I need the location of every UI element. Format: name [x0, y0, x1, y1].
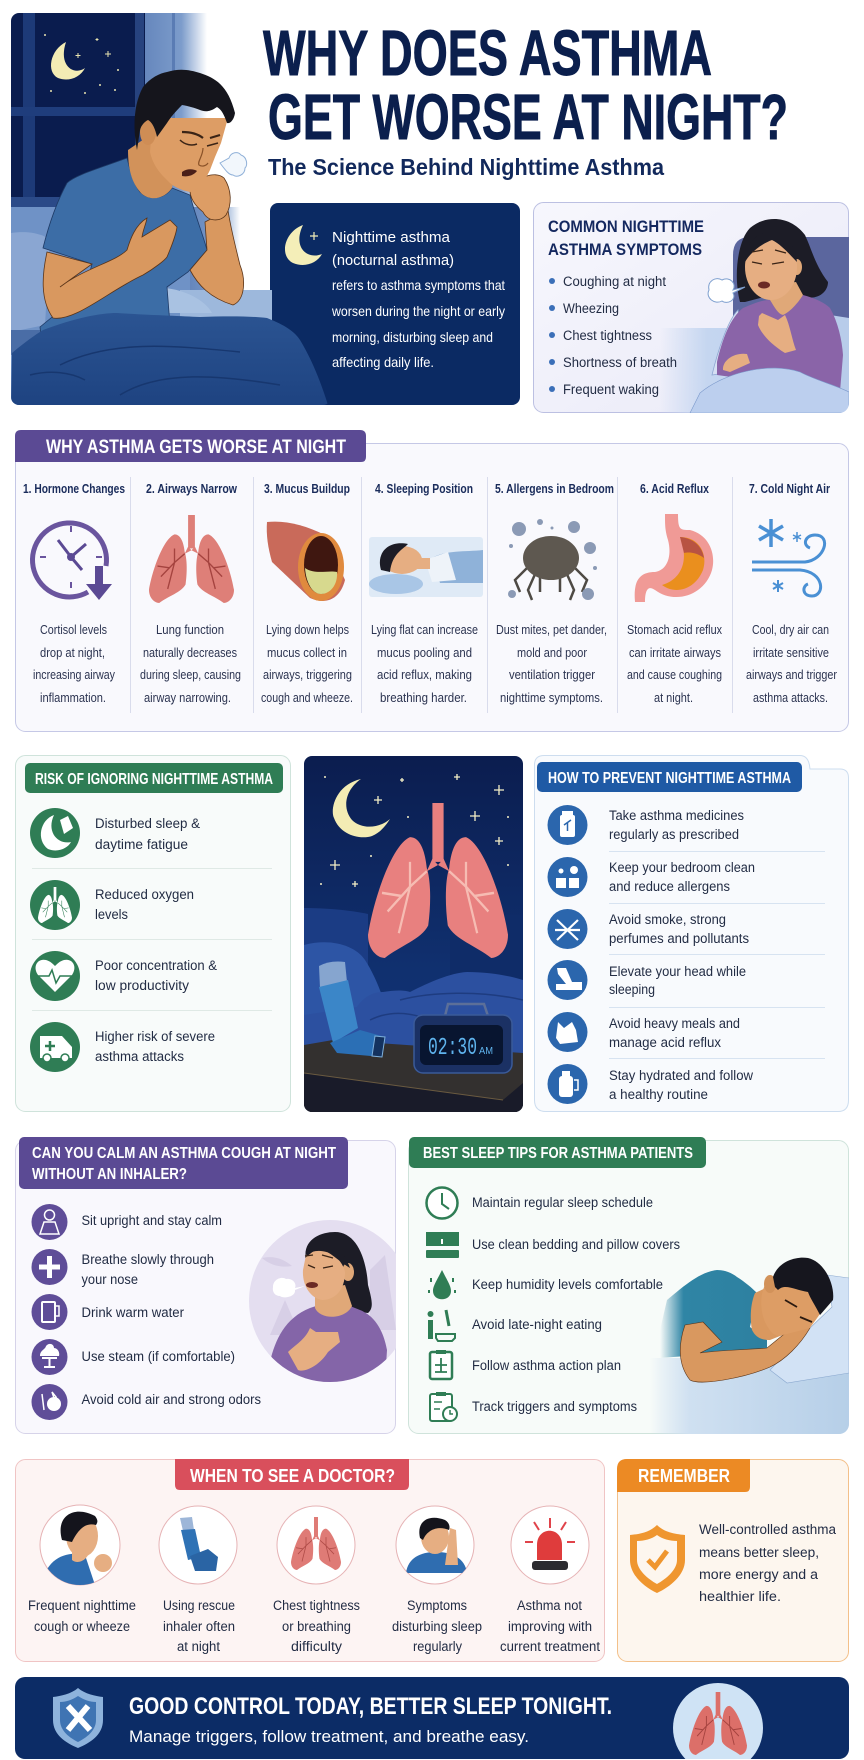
column 6: acid reflux: 6. Acid Reflux	[640, 482, 709, 496]
icon: dust mite	[508, 519, 597, 600]
lungs	[368, 803, 508, 958]
tip: late eating: Avoid late-night eating	[472, 1317, 602, 1332]
heading	[548, 218, 704, 259]
tip: medicines: regularly as prescribed	[609, 827, 739, 842]
symptom list: Chest tightness	[563, 328, 652, 343]
sign: frequent cough: Frequent nighttime	[28, 1598, 136, 1613]
icon: lungs in circle	[673, 1683, 763, 1760]
tip: bedding: Use clean bedding and pillow covers	[472, 1237, 680, 1252]
symptom list: Frequent waking	[563, 382, 659, 397]
inhaler	[319, 962, 385, 1057]
tip: breathe slowly: your nose	[82, 1272, 138, 1287]
risk: reduced oxygen: levels	[95, 907, 128, 922]
column 5: allergens: Dust mites, pet dander,	[496, 623, 607, 637]
column 4: sleeping position: Lying flat can increase	[371, 623, 478, 637]
sign: disturbed sleep: disturbing sleep	[392, 1619, 482, 1634]
column 5: allergens: mold and poor	[517, 646, 587, 660]
tip: action plan: Follow asthma action plan	[472, 1358, 621, 1373]
risk: disturbed sleep: Disturbed sleep &	[95, 816, 200, 831]
sign: rescue inhaler: Using rescue	[163, 1598, 235, 1613]
heading	[537, 762, 802, 792]
panel: remember	[617, 1459, 848, 1662]
tip: avoid heavy meals: Avoid heavy meals and	[609, 1016, 740, 1031]
column 1: hormone changes: drop at night,	[40, 646, 105, 660]
sign: not improving: current treatment	[500, 1639, 600, 1654]
heading	[617, 1459, 750, 1492]
risk: poor concentration: Poor concentration &	[95, 958, 217, 973]
column 1: hormone changes: increasing airway	[33, 668, 116, 682]
column 3: mucus buildup: mucus collect in	[267, 646, 347, 660]
heading	[409, 1137, 706, 1168]
column 6: acid reflux	[627, 482, 723, 705]
message: Well-controlled asthma	[699, 1522, 836, 1537]
definition text: refers to asthma symptoms that	[332, 277, 505, 293]
risk: poor concentration: low productivity	[95, 978, 189, 993]
tip: avoid heavy meals: manage acid reflux	[609, 1035, 721, 1050]
symptom list: Coughing at night	[563, 274, 666, 289]
column 7: cold night air: 7. Cold Night Air	[749, 482, 830, 496]
column 2: airways narrow: airway narrowing.	[144, 691, 231, 705]
window with night sky	[11, 13, 207, 213]
alarm clock: 02:30	[428, 1035, 477, 1062]
column 7: cold night air: airways and trigger	[746, 668, 837, 682]
tip: avoid smoke	[548, 909, 749, 949]
tip: track triggers	[430, 1392, 637, 1421]
tip: medicines: Take asthma medicines	[609, 808, 744, 823]
message: more energy and a	[699, 1567, 819, 1582]
panel: calm cough without inhaler	[16, 1137, 396, 1434]
icon: inflamed lungs	[149, 515, 234, 603]
risk: poor concentration	[30, 951, 217, 1001]
risk: disturbed sleep: daytime fatigue	[95, 837, 188, 852]
column 1: hormone changes	[23, 482, 125, 705]
definition text: affecting daily life.	[332, 354, 434, 370]
tip: late eating	[428, 1310, 602, 1341]
column 1: hormone changes: inflammation.	[40, 691, 106, 705]
definition text: morning, disturbing sleep and	[332, 329, 493, 345]
tip: avoid cold air	[32, 1384, 261, 1420]
tip: warm water	[32, 1294, 184, 1330]
sign: disturbed sleep: Symptoms	[407, 1598, 467, 1613]
illustration: woman in bed	[660, 219, 849, 413]
column 2: airways narrow: naturally decreases	[143, 646, 237, 660]
heading: REMEMBER	[638, 1466, 730, 1486]
risk: reduced oxygen: Reduced oxygen	[95, 887, 194, 902]
man's head	[135, 70, 235, 192]
panel: best sleep tips	[408, 1137, 849, 1434]
tip: steam: Use steam (if comfortable)	[82, 1349, 235, 1364]
cough cloud	[220, 153, 247, 176]
definition text: Nighttime asthma	[332, 230, 451, 246]
panel: when to see a doctor	[16, 1459, 604, 1662]
slogan: Manage triggers, follow treatment, and breathe easy.	[129, 1727, 529, 1746]
tip: clean bedroom: Keep your bedroom clean	[609, 860, 755, 875]
moon and stars	[320, 774, 509, 887]
sign: chest tightness: or breathing	[282, 1619, 351, 1634]
alarm clock	[414, 1004, 512, 1073]
icon: snowflake and wind	[752, 519, 825, 596]
column 5: allergens: nighttime symptoms.	[500, 691, 603, 705]
bed and pillows	[11, 207, 272, 407]
panel: definition	[270, 203, 520, 405]
title	[263, 17, 788, 153]
illustration: man coughing at night	[11, 13, 328, 407]
heading: WITHOUT AN INHALER?	[32, 1166, 187, 1183]
sign: not improving: improving with	[508, 1619, 592, 1634]
tip: stay hydrated: Stay hydrated and follow	[609, 1068, 753, 1083]
column 5: allergens	[495, 482, 614, 705]
heading: RISK OF IGNORING NIGHTTIME ASTHMA	[35, 771, 273, 788]
man's arm on chest	[43, 218, 177, 318]
tip: sit upright: Sit upright and stay calm	[82, 1213, 222, 1228]
tip: breathe slowly: Breathe slowly through	[82, 1252, 214, 1267]
tip: warm water: Drink warm water	[82, 1305, 184, 1320]
column 3: mucus buildup: Lying down helps	[266, 623, 349, 637]
tip: avoid cold air: Avoid cold air and strong odors	[82, 1392, 261, 1407]
heading tab: WHY ASTHMA GETS WORSE AT NIGHT	[46, 437, 346, 458]
definition text	[331, 230, 505, 370]
risk: disturbed sleep	[30, 808, 200, 858]
subtitle: The Science Behind Nighttime Asthma	[268, 154, 664, 180]
column 2: airways narrow: during sleep, causing	[140, 668, 241, 682]
icon: airway with mucus	[267, 522, 345, 601]
column 7: cold night air: irritate sensitive	[753, 646, 829, 660]
man's raised arm and fist	[190, 175, 244, 305]
column 6: acid reflux: and cause coughing	[627, 668, 722, 682]
risk: severe attacks	[30, 1022, 215, 1072]
icon: clock with arrow	[32, 523, 112, 600]
column 6: acid reflux: Stomach acid reflux	[627, 623, 723, 637]
column 4: sleeping position: acid reflux, making	[377, 668, 472, 682]
heading	[175, 1459, 409, 1490]
tip: humidity: Keep humidity levels comfortable	[472, 1277, 663, 1292]
panel: prevention	[534, 756, 848, 1112]
tip: elevate head: Elevate your head while	[609, 964, 746, 979]
heading	[19, 1137, 348, 1189]
message	[699, 1522, 836, 1604]
heading: ASTHMA SYMPTOMS	[548, 241, 702, 259]
heading: HOW TO PREVENT NIGHTTIME ASTHMA	[548, 770, 791, 787]
tip: stay hydrated	[548, 1064, 753, 1104]
table	[304, 1040, 523, 1112]
risk: severe attacks: Higher risk of severe	[95, 1029, 215, 1044]
tip: bedding	[426, 1232, 680, 1258]
column 4: sleeping position	[369, 482, 483, 705]
slogan: GOOD CONTROL TODAY, BETTER SLEEP TONIGHT.	[129, 1693, 612, 1720]
sign: disturbed sleep	[392, 1506, 482, 1654]
message: healthier life.	[699, 1589, 781, 1604]
column 5: allergens: ventilation trigger	[509, 668, 595, 682]
tip: clean bedroom: and reduce allergens	[609, 879, 730, 894]
column 7: cold night air: Cool, dry air can	[752, 623, 829, 637]
icon: shield with check	[630, 1525, 685, 1593]
column 2: airways narrow: 2. Airways Narrow	[146, 482, 237, 496]
column 3: mucus buildup: cough and wheeze.	[261, 691, 353, 705]
column 4: sleeping position: mucus pooling and	[377, 646, 472, 660]
illustration: night scene with lungs, inhaler and clock	[304, 756, 523, 1112]
column 7: cold night air: asthma attacks.	[753, 691, 828, 705]
sign: chest tightness	[273, 1506, 360, 1654]
heading: CAN YOU CALM AN ASTHMA COUGH AT NIGHT	[32, 1145, 336, 1162]
heading: BEST SLEEP TIPS FOR ASTHMA PATIENTS	[423, 1145, 693, 1162]
heading	[25, 763, 283, 793]
sign: not improving	[500, 1506, 600, 1654]
sign: rescue inhaler	[159, 1506, 237, 1654]
column 3: mucus buildup: airways, triggering	[263, 668, 352, 682]
column 3: mucus buildup: 3. Mucus Buildup	[264, 482, 350, 496]
sign: rescue inhaler: at night	[177, 1639, 220, 1654]
tip: elevate head	[548, 960, 746, 1000]
definition text: worsen during the night or early	[331, 303, 505, 319]
tip: breathe slowly	[32, 1249, 214, 1287]
tip: clean bedroom	[548, 857, 755, 897]
alarm clock: AM	[479, 1046, 493, 1057]
column 2: airways narrow	[140, 482, 241, 705]
icon: stomach	[635, 514, 713, 602]
column 6: acid reflux: at night.	[654, 691, 693, 705]
column 4: sleeping position: breathing harder.	[380, 691, 467, 705]
footer banner	[15, 1677, 849, 1760]
panel: why asthma gets worse	[15, 430, 848, 732]
tip: elevate head: sleeping	[609, 982, 655, 997]
heading tab	[15, 430, 366, 462]
tip: medicines	[548, 805, 744, 845]
column 6: acid reflux: can irritate airways	[629, 646, 721, 660]
tip: avoid heavy meals	[548, 1012, 740, 1052]
icon: person lying flat	[369, 537, 483, 597]
risk: reduced oxygen	[30, 880, 194, 930]
tip: track triggers: Track triggers and symptoms	[472, 1399, 637, 1414]
column 5: allergens: 5. Allergens in Bedroom	[495, 482, 614, 496]
sign: frequent cough	[28, 1505, 136, 1634]
bed and pillows	[304, 908, 523, 1060]
column 3: mucus buildup	[261, 482, 353, 705]
definition text: (nocturnal asthma)	[332, 253, 454, 269]
panel: symptoms	[534, 202, 849, 413]
sign: frequent cough: cough or wheeze	[34, 1619, 130, 1634]
sign: chest tightness: Chest tightness	[273, 1598, 360, 1613]
tip: schedule: Maintain regular sleep schedule	[472, 1195, 653, 1210]
heading: COMMON NIGHTTIME	[548, 218, 704, 236]
man's shirt	[40, 158, 207, 345]
risk: severe attacks: asthma attacks	[95, 1049, 184, 1064]
panel: risks	[16, 756, 290, 1112]
symptom list: Wheezing	[563, 301, 619, 316]
tip: avoid smoke: Avoid smoke, strong	[609, 912, 726, 927]
sign: disturbed sleep: regularly	[413, 1639, 462, 1654]
slogan	[129, 1693, 612, 1746]
tip: action plan	[430, 1350, 621, 1379]
icon: shield	[53, 1688, 103, 1748]
symptom list	[549, 274, 677, 397]
tip: sit upright	[32, 1204, 222, 1240]
tip: schedule	[426, 1188, 653, 1218]
symptom list: Shortness of breath	[563, 355, 677, 370]
column 2: airways narrow: Lung function	[156, 623, 224, 637]
column 1: hormone changes: Cortisol levels	[40, 623, 107, 637]
tip: avoid smoke: perfumes and pollutants	[609, 931, 749, 946]
column 1: hormone changes: 1. Hormone Changes	[23, 482, 125, 496]
man's neck	[128, 140, 173, 198]
blanket	[11, 313, 328, 405]
tip: humidity	[429, 1270, 663, 1299]
illustration: man sleeping	[650, 1258, 849, 1434]
tip: steam	[32, 1339, 235, 1375]
icon: crescent moon	[285, 225, 322, 265]
sign: rescue inhaler: inhaler often	[163, 1619, 235, 1634]
illustration: woman breathing	[249, 1220, 396, 1382]
message: means better sleep,	[699, 1545, 819, 1560]
column 7: cold night air	[746, 482, 837, 705]
sign: not improving: Asthma not	[517, 1598, 582, 1613]
column 4: sleeping position: 4. Sleeping Position	[375, 482, 473, 496]
heading: WHEN TO SEE A DOCTOR?	[190, 1466, 395, 1486]
tip: stay hydrated: a healthy routine	[609, 1087, 708, 1102]
sign: chest tightness: difficulty	[291, 1639, 342, 1654]
